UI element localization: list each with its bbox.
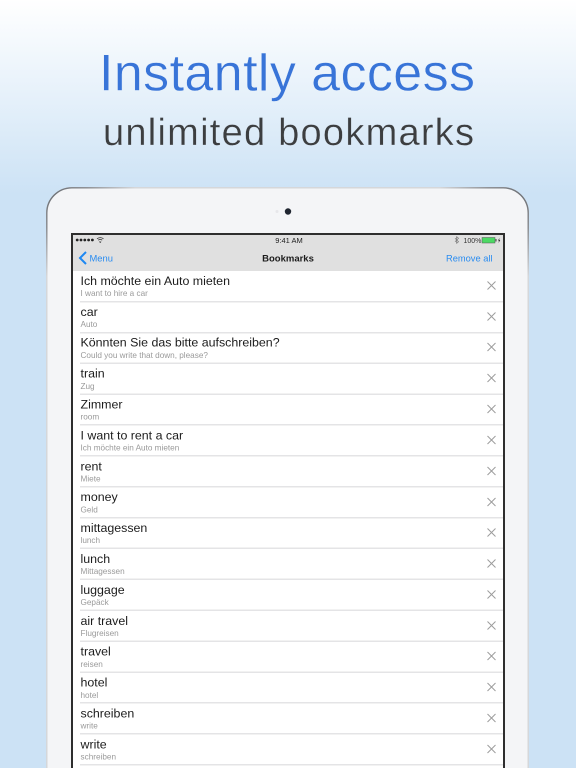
row 8 xyxy=(80,490,503,518)
row 14 xyxy=(80,676,503,704)
icon: back chevron xyxy=(80,252,86,264)
row 10: Mittagessen xyxy=(80,567,125,576)
row 15: write xyxy=(80,722,98,730)
row 3: Könnten Sie das bitte aufschreiben? xyxy=(80,336,280,350)
row 11 xyxy=(80,583,503,611)
battery percent: 100% xyxy=(464,238,481,245)
row 10 xyxy=(80,552,503,580)
icon: camera xyxy=(285,208,291,215)
row 7: rent xyxy=(80,460,102,474)
row 7 xyxy=(80,460,503,488)
row 13: reisen xyxy=(80,660,103,669)
bookmark list xyxy=(80,274,503,766)
row 8: money xyxy=(80,490,118,504)
row 15: schreiben xyxy=(80,706,134,720)
navigation bar xyxy=(73,235,503,271)
row 9: mittagessen xyxy=(80,521,147,535)
title: Instantly access xyxy=(99,44,475,102)
row 8: Geld xyxy=(80,506,98,514)
row 5 xyxy=(80,398,503,426)
row 7: Miete xyxy=(80,474,101,484)
row 16: write xyxy=(80,738,107,752)
row 2: car xyxy=(80,305,98,319)
icon: battery xyxy=(482,238,500,243)
icon: front sensor xyxy=(276,210,278,213)
row 10: lunch xyxy=(80,552,110,566)
row 6: Ich möchte ein Auto mieten xyxy=(80,444,180,452)
row 14: hotel xyxy=(80,691,98,700)
row 3 xyxy=(80,336,503,364)
subtitle: unlimited bookmarks xyxy=(103,112,474,154)
signal dots xyxy=(76,239,94,241)
remove all: Remove all xyxy=(446,254,493,264)
row 12 xyxy=(80,614,503,642)
row 13: travel xyxy=(80,644,111,658)
row 16: schreiben xyxy=(80,752,116,762)
row 4: Zug xyxy=(80,382,95,391)
row 12: air travel xyxy=(80,614,128,628)
row 14: hotel xyxy=(80,676,107,690)
row 16 xyxy=(80,738,503,766)
icon: bluetooth xyxy=(455,236,458,244)
row 5: Zimmer xyxy=(80,398,122,412)
row 5: room xyxy=(80,412,99,422)
row 6: I want to rent a car xyxy=(80,428,183,442)
row 4: train xyxy=(80,366,105,380)
row 1: I want to hire a car xyxy=(80,289,148,298)
clock: 9:41 AM xyxy=(275,236,303,245)
row 1 xyxy=(80,274,503,302)
row 9 xyxy=(80,521,503,549)
nav title: Bookmarks xyxy=(262,254,314,264)
tablet device xyxy=(46,187,529,768)
row 15 xyxy=(80,706,503,734)
row 11: luggage xyxy=(80,583,125,597)
row 3: Could you write that down, please? xyxy=(80,351,208,360)
row 6 xyxy=(80,428,503,456)
row 13 xyxy=(80,644,503,673)
row 2: Auto xyxy=(80,320,98,329)
icon: wifi xyxy=(97,238,104,242)
screen xyxy=(71,233,505,768)
back label: Menu xyxy=(90,252,113,264)
row 12: Flugreisen xyxy=(80,629,119,638)
row 9: lunch xyxy=(80,536,101,545)
row 2 xyxy=(80,305,503,334)
row 1: Ich möchte ein Auto mieten xyxy=(80,274,230,288)
row 4 xyxy=(80,366,503,395)
row 11: Gepäck xyxy=(80,598,110,607)
